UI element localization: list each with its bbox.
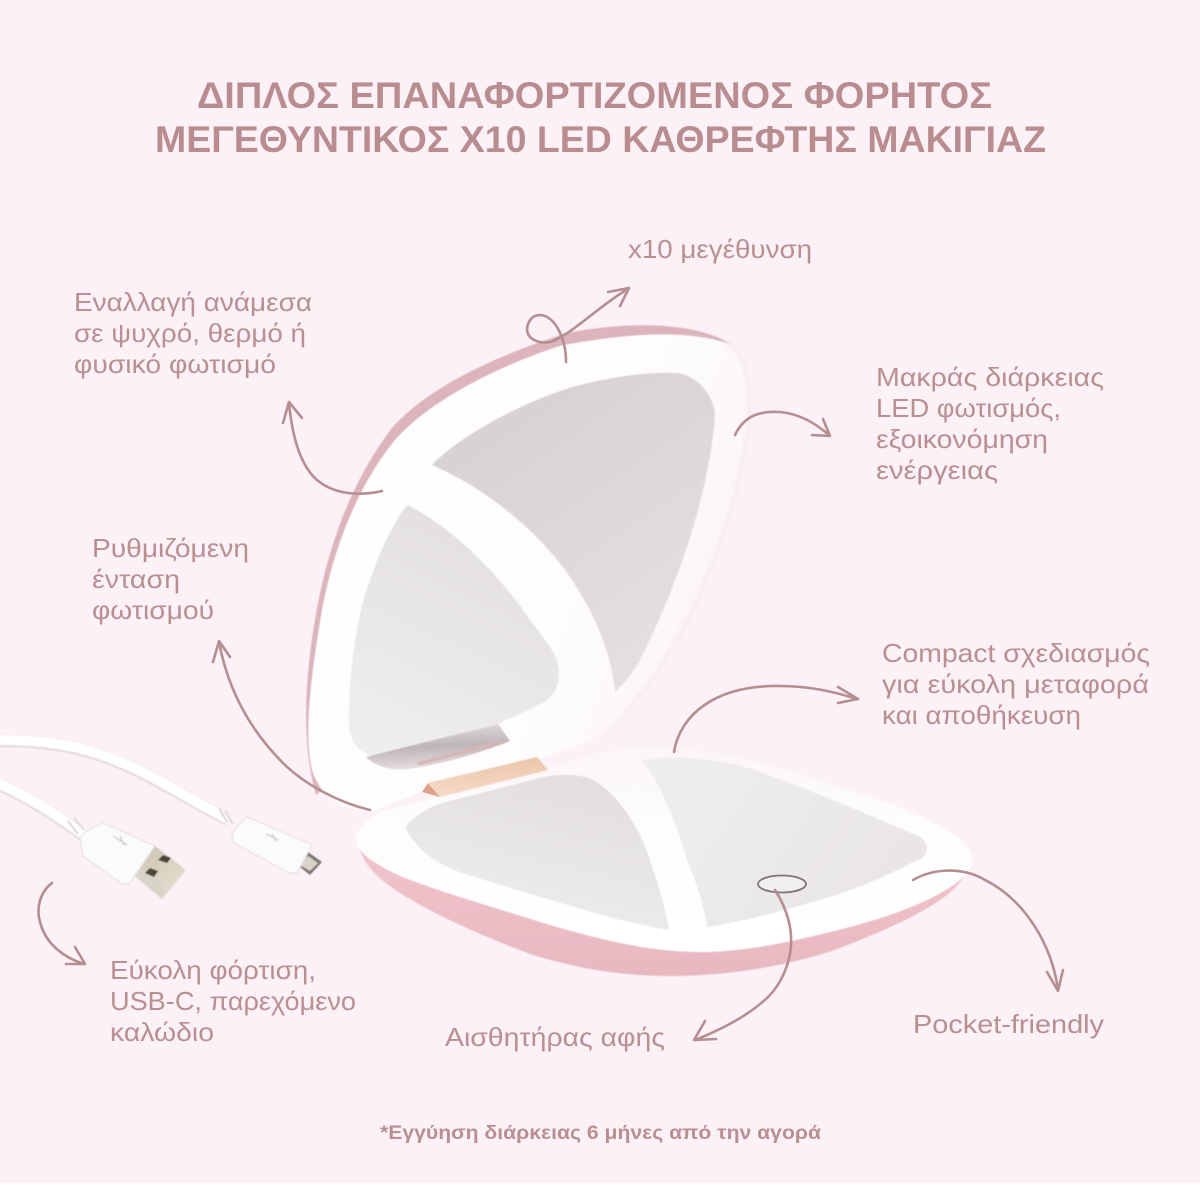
- lower mirror panel: [349, 505, 559, 757]
- lid white frame: [308, 334, 749, 811]
- label: easy charging: [110, 955, 356, 1047]
- hinge reflection band: [366, 724, 510, 769]
- label: compact design: και αποθήκευση: [882, 700, 1081, 730]
- label: compact design: [882, 638, 1150, 730]
- label: adjustable intensity: Ρυθμιζόμενη: [92, 533, 249, 563]
- upper mirror panel: [432, 373, 715, 692]
- base white frame: [356, 747, 973, 952]
- mirror illustration: [306, 325, 973, 976]
- lid frame soft right edge: [625, 343, 749, 712]
- label: lighting modes: Εναλλαγή ανάμεσα: [74, 287, 312, 317]
- label: LED lighting: Μακράς διάρκειας: [876, 362, 1104, 392]
- label: compact design: για εύκολη μεταφορά: [882, 669, 1149, 699]
- label: LED lighting: [876, 362, 1104, 485]
- USB cable illustration: [0, 740, 322, 899]
- label: touch sensor: Αισθητήρας αφής: [445, 1022, 665, 1052]
- hinge: [428, 757, 548, 797]
- label: LED lighting: LED φωτισμός,: [876, 393, 1061, 423]
- label: compact design: Compact σχεδιασμός: [882, 638, 1150, 668]
- base left mirror: [405, 775, 669, 930]
- arrow: LED lighting: [735, 412, 830, 436]
- label: LED lighting: ενέργειας: [876, 455, 998, 485]
- label: adjustable intensity: ένταση: [92, 564, 180, 594]
- title: ΔΙΠΛΟΣ ΕΠΑΝΑΦΟΡΤΙΖΟΜΕΝΟΣ ΦΟΡΗΤΟΣ: [197, 75, 992, 116]
- label: x10 magnification: x10 μεγέθυνση: [628, 234, 812, 264]
- label: easy charging: καλώδιο: [110, 1017, 214, 1047]
- USB-A plug: [80, 823, 186, 899]
- arrow: adjustable intensity: [213, 641, 370, 810]
- label: lighting modes: σε ψυχρό, θερμό ή: [74, 318, 306, 348]
- title: ΜΕΓΕΘΥΝΤΙΚΟΣ X10 LED ΚΑΘΡΕΦΤΗΣ ΜΑΚΙΓΙΑΖ: [155, 119, 1046, 160]
- label: easy charging: Εύκολη φόρτιση,: [110, 955, 316, 985]
- footnote: *Εγγύηση διάρκειας 6 μήνες από την αγορά: [380, 1123, 821, 1144]
- label: pocket friendly: Pocket-friendly: [913, 1009, 1104, 1039]
- arrow: x10 magnification: [527, 288, 629, 362]
- arrow: compact design: [674, 686, 858, 752]
- lid pink shell: [306, 325, 729, 795]
- base right mirror: [642, 758, 927, 927]
- title: [155, 75, 1046, 160]
- label: LED lighting: εξοικονόμηση: [876, 424, 1048, 454]
- label: easy charging: USB-C, παρεχόμενο: [110, 986, 356, 1016]
- arrow: pocket friendly: [913, 871, 1063, 991]
- touch sensor ring: [758, 876, 806, 892]
- arrow: lighting modes: [283, 402, 382, 494]
- label: lighting modes: [74, 287, 312, 379]
- base pink shell: [360, 830, 966, 976]
- label: adjustable intensity: [92, 533, 249, 625]
- micro-USB plug: [232, 817, 322, 875]
- arrow: easy charging: [38, 883, 85, 964]
- arrow: touch sensor: [694, 890, 791, 1040]
- label: lighting modes: φυσικό φωτισμό: [74, 349, 276, 379]
- label: adjustable intensity: φωτισμού: [92, 595, 214, 625]
